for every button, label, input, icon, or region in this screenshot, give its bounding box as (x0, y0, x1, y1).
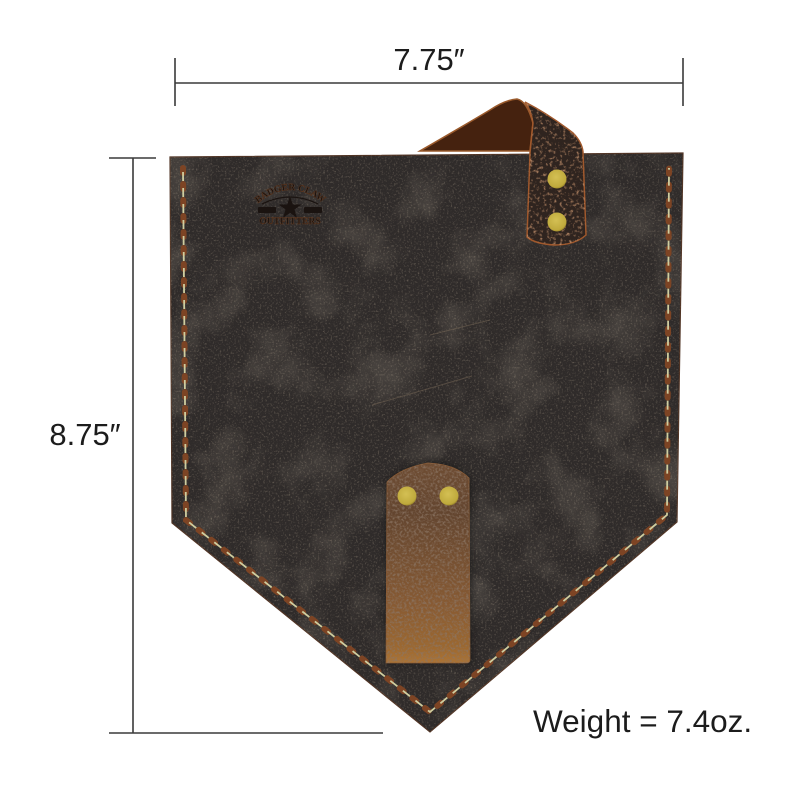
icon: rivet (548, 170, 566, 188)
stitching (183, 168, 669, 712)
maker's logo stamp: OUTFITTERS (259, 217, 321, 227)
bottom tan leather strap with rivets (380, 455, 475, 670)
maker's logo stamp (254, 184, 326, 227)
dimension: width 7.75 inches: 7.75″ (393, 42, 465, 77)
infographic: leather pouch with dimensions (50, 49, 750, 738)
dimension: height 8.75 inches: 8.75″ (49, 417, 121, 452)
icon: rivet (548, 212, 566, 232)
leather strap back of loop (420, 99, 533, 151)
maker's logo stamp: BADGER CLAW (254, 184, 326, 204)
icon: rivet (398, 486, 416, 506)
dimension: width 7.75 inches (175, 42, 683, 106)
icon: rivet (440, 486, 458, 506)
weight label: Weight = 7.4oz. (533, 703, 752, 739)
dimension: height 8.75 inches (49, 158, 383, 733)
leather pouch body (165, 150, 690, 740)
top leather loop with rivets (524, 101, 587, 246)
